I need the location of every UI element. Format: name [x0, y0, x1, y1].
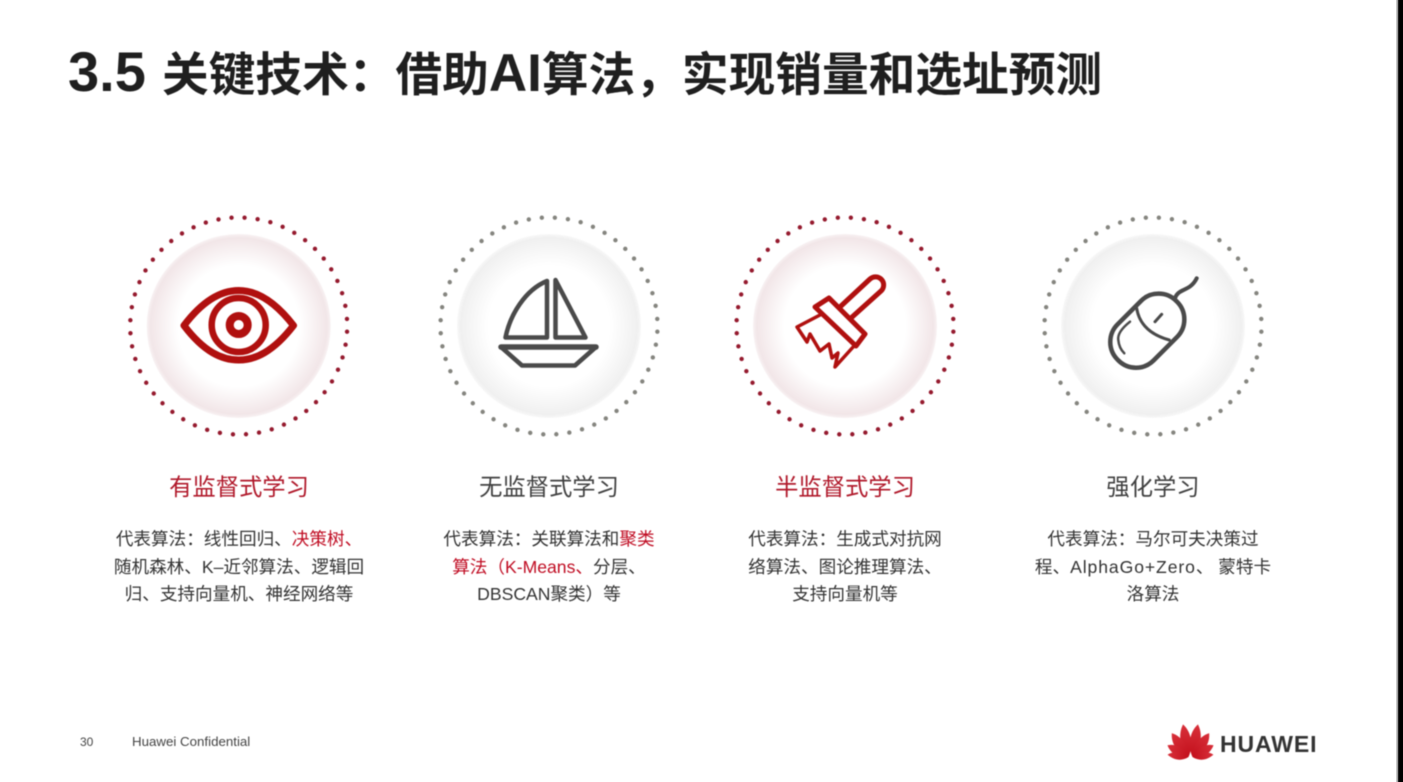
icon: sailboat in dotted circle: [438, 214, 660, 438]
icon: petal mark: [1167, 724, 1214, 760]
panel: supervised learning: [114, 214, 364, 604]
title: 关键技术：借助AI算法，实现销量和选址预测: [162, 44, 1102, 103]
text: semi-supervised algorithms: 支持向量机等: [792, 584, 898, 604]
text: reinforcement algorithms: [1034, 529, 1271, 604]
text: reinforcement algorithms: 代表算法：马尔可夫决策过: [1047, 529, 1259, 549]
panel: reinforcement learning: [1034, 214, 1271, 604]
heading: unsupervised learning: 无监督式学习: [479, 474, 619, 500]
text: reinforcement algorithms: 洛算法: [1127, 584, 1179, 604]
logo wordmark: HUAWEI: [1220, 731, 1317, 757]
icon: computer mouse in dotted circle: [1042, 214, 1264, 438]
title: 3.5: [68, 40, 146, 103]
panel: unsupervised learning: [438, 214, 660, 604]
right edge black bar: [1396, 0, 1403, 782]
text: supervised algorithms: 随机森林、K–近邻算法、逻辑回: [114, 556, 364, 576]
text: supervised algorithms: [114, 529, 364, 604]
heading: reinforcement learning: 强化学习: [1106, 474, 1200, 500]
text: semi-supervised algorithms: 络算法、图论推理算法、: [748, 556, 942, 576]
text: supervised algorithms: 代表算法：线性回归、决策树、: [116, 529, 362, 549]
text: unsupervised algorithms: [443, 529, 655, 604]
text: semi-supervised algorithms: 代表算法：生成式对抗网: [748, 529, 942, 549]
page number: 30: [80, 735, 93, 749]
text: supervised algorithms: 归、支持向量机、神经网络等: [125, 584, 353, 604]
heading: semi-supervised learning: 半监督式学习: [775, 474, 915, 500]
text: reinforcement algorithms: 程、AlphaGo+Zero、 蒙特卡: [1035, 556, 1271, 576]
heading: supervised learning: 有监督式学习: [169, 474, 309, 500]
icon: eye in dotted circle: [127, 214, 350, 438]
confidentiality note: Huawei Confidential: [132, 734, 250, 749]
icon: paintbrush in dotted circle: [734, 214, 956, 438]
text: unsupervised algorithms: 算法（K-Means、分层、: [452, 556, 646, 576]
text: semi-supervised algorithms: [748, 529, 942, 604]
text: unsupervised algorithms: 代表算法：关联算法和聚类: [443, 529, 655, 549]
logo: Huawei: [1167, 724, 1317, 760]
text: unsupervised algorithms: DBSCAN聚类）等: [477, 584, 621, 604]
panel: semi-supervised learning: [734, 214, 956, 604]
